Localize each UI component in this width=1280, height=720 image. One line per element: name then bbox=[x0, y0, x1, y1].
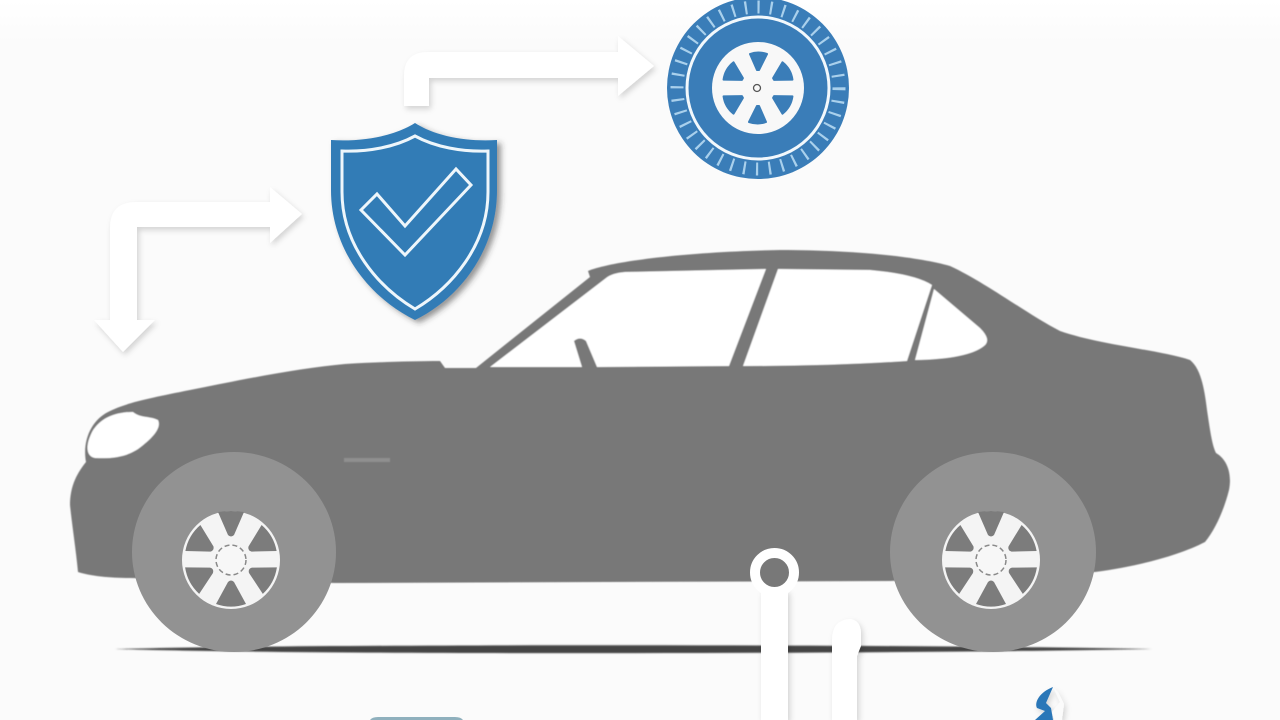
front window bbox=[490, 269, 766, 367]
middle window bbox=[743, 269, 932, 366]
arrow: car to shield bbox=[94, 187, 302, 352]
door handle bbox=[344, 458, 390, 462]
icon: blue tool tip bbox=[1035, 687, 1064, 720]
rear wheel bbox=[890, 452, 1096, 652]
icon: wrench handle bbox=[755, 553, 794, 720]
icon: shield with check mark bbox=[331, 123, 497, 320]
car bbox=[70, 250, 1230, 583]
icon: partial panel at bottom edge bbox=[370, 717, 463, 720]
car body bbox=[70, 250, 1230, 583]
icon: tire bbox=[667, 0, 849, 179]
headlight bbox=[87, 412, 159, 458]
icon: second tool handle bbox=[832, 619, 861, 720]
front wheel bbox=[132, 452, 336, 652]
rear window bbox=[915, 289, 987, 360]
ground shadow bbox=[115, 645, 1152, 653]
arrow: shield to tire bbox=[404, 36, 654, 106]
